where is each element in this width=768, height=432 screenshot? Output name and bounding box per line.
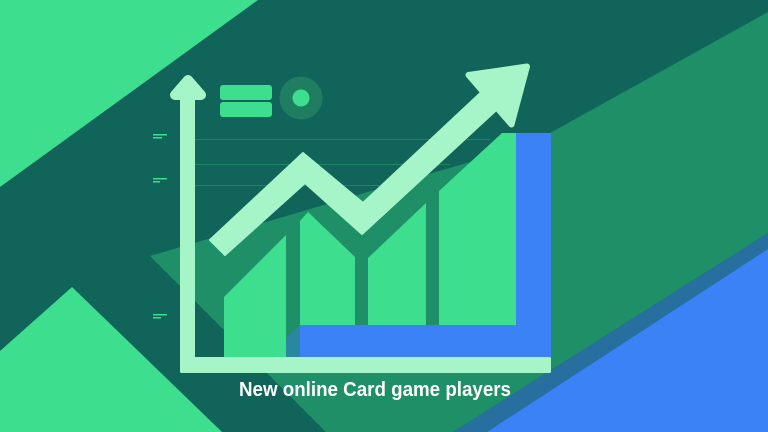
icon: card stack: [220, 85, 272, 117]
background: mid green diagonal shape: [150, 12, 768, 432]
bar 1: [224, 235, 286, 357]
bar 4: [439, 133, 516, 325]
y axis: [180, 95, 195, 365]
y axis arrow cap: [175, 80, 201, 95]
y axis tick marks: [153, 134, 167, 318]
chart axes: [175, 80, 551, 373]
icon: coin: [280, 76, 322, 120]
bar 3: [368, 203, 426, 325]
background: blue band: [453, 233, 768, 432]
caption: New online Card game players: [239, 379, 511, 401]
background: blue corner: [487, 249, 768, 432]
background: bottom-left green peak: [0, 287, 222, 432]
blue L-shaped bar: [300, 133, 551, 357]
teal overlap wedge: [286, 325, 300, 357]
bar chart: [224, 133, 516, 357]
trend arrow: [210, 66, 527, 255]
background: top-left green triangle: [0, 0, 258, 187]
arrow shaft: [210, 84, 505, 255]
arrow head: [468, 66, 527, 124]
bar 2: [300, 212, 355, 325]
x axis: [180, 357, 551, 373]
